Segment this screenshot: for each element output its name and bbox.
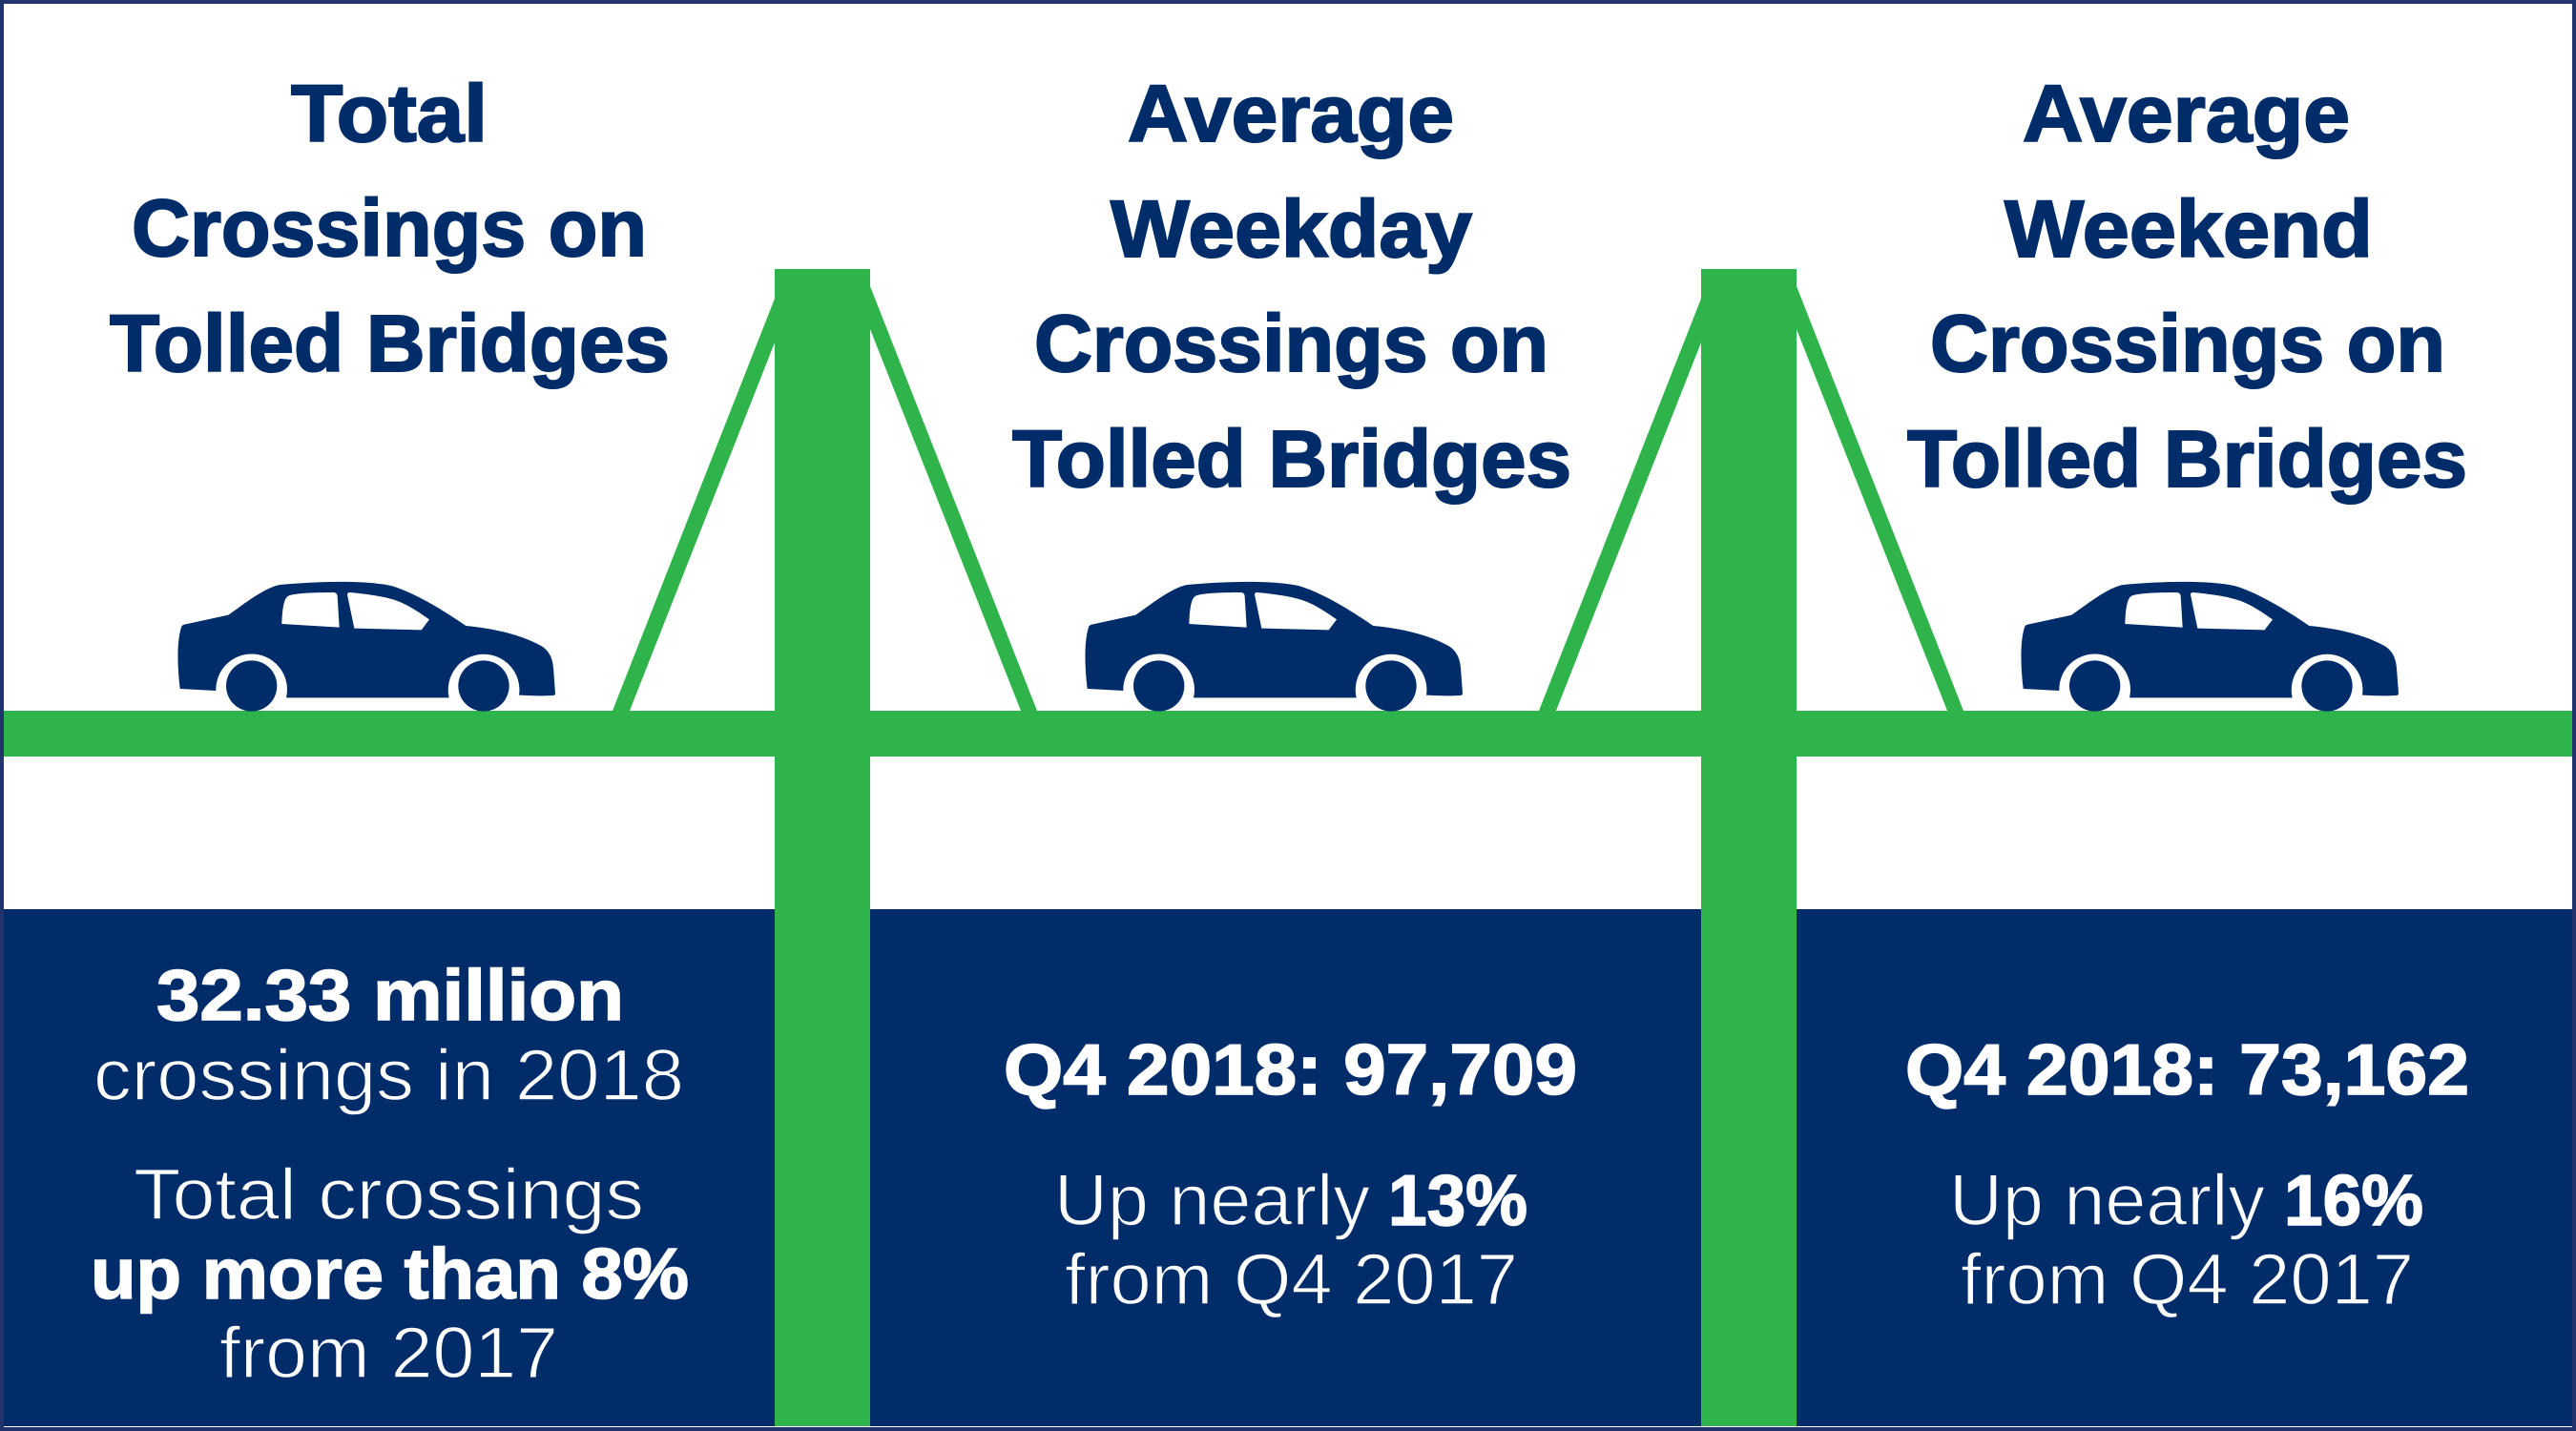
heading: average weekday crossings [1012, 69, 1571, 504]
stats: weekday crossings: 13% [1388, 1160, 1527, 1240]
stats: weekend crossings: Q4 2018: 73,162 [1905, 1029, 2469, 1110]
right tower [1701, 269, 1797, 1426]
stats: weekend crossings [1905, 1029, 2469, 1320]
heading: average weekday crossings: Crossings on [1034, 299, 1548, 388]
heading: average weekend crossings: Average [2023, 69, 2350, 158]
road deck [4, 711, 2572, 757]
left tower [775, 269, 870, 1426]
right tower cables [1539, 286, 1963, 711]
icon: car left [177, 582, 555, 712]
heading: average weekday crossings: Weekday [1111, 184, 1472, 274]
stats: total crossings: from 2017 [219, 1313, 558, 1394]
stats: weekend crossings: 16% [2284, 1160, 2423, 1240]
icon: car middle [1085, 582, 1463, 712]
heading: average weekend crossings: Tolled Bridges [1907, 414, 2467, 504]
heading: average weekday crossings: Tolled Bridges [1012, 414, 1571, 504]
stats: total crossings: up more than 8% [91, 1234, 689, 1314]
stats: total crossings: 32.33 million [156, 955, 624, 1035]
icon: car right [2021, 582, 2399, 712]
stats: total crossings: Total crossings [134, 1154, 644, 1235]
heading: total crossings [110, 69, 670, 388]
stats: total crossings [91, 955, 689, 1394]
heading: average weekday crossings: Average [1128, 69, 1454, 158]
stats: weekend crossings: Up nearly [1949, 1160, 2265, 1241]
heading: total crossings: Tolled Bridges [110, 299, 670, 388]
heading: average weekend crossings: Weekend [2005, 184, 2373, 274]
heading: average weekend crossings: Crossings on [1930, 299, 2445, 388]
heading: total crossings: Total [291, 69, 488, 158]
navy stats band [4, 909, 2572, 1426]
stats: weekday crossings: Up nearly [1054, 1160, 1370, 1241]
stats: weekend crossings: from Q4 2017 [1961, 1239, 2414, 1320]
left tower cables [613, 286, 1037, 711]
stats: weekday crossings [1004, 1029, 1577, 1320]
stats: total crossings: crossings in 2018 [93, 1035, 684, 1116]
stats: weekday crossings: Q4 2018: 97,709 [1004, 1029, 1577, 1110]
heading: average weekend crossings [1907, 69, 2467, 504]
heading: total crossings: Crossings on [132, 183, 647, 273]
stats: weekday crossings: from Q4 2017 [1065, 1239, 1518, 1320]
